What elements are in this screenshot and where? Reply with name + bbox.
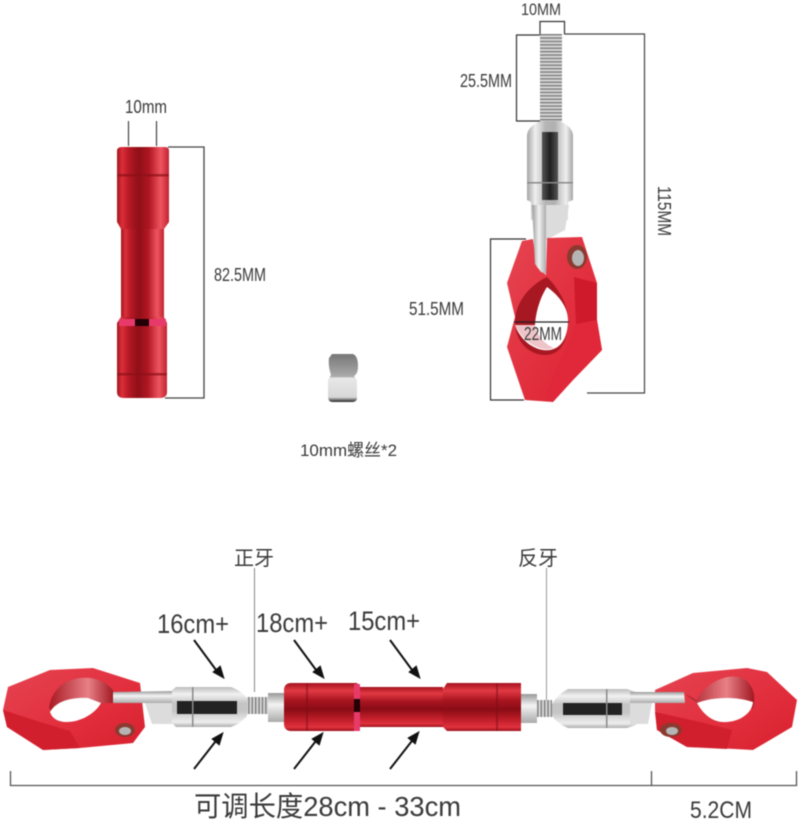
dimension: total length 115MM: 115MM (654, 186, 674, 236)
right nut (521, 694, 537, 723)
left bracket plate (145, 703, 172, 724)
left red clamp (3, 668, 145, 750)
dimension bracket: clamp width (652, 771, 796, 786)
dimension: clamp height 51.5MM (409, 239, 526, 400)
clamp bore (515, 277, 568, 355)
right red clamp (655, 668, 797, 750)
right bracket plate (630, 703, 652, 724)
label: standard thread: 正牙 (234, 548, 274, 570)
clamp arm (532, 205, 546, 274)
dimension: bore 22MM: 22MM (524, 324, 562, 344)
label: reverse thread: 反牙 (518, 547, 558, 570)
left silver sleeve (172, 687, 247, 727)
dimension: rod width 10mm (125, 97, 167, 146)
sleeve band (527, 182, 573, 184)
dimension: total length 115MM (564, 34, 674, 393)
silver bracket plate (546, 205, 569, 240)
left sleeve dark bar (177, 701, 237, 714)
right clamp arm (630, 692, 685, 703)
dimension: thread length 25.5MM (460, 35, 540, 121)
right thread (537, 700, 552, 717)
clamp bolt (567, 245, 587, 269)
dimension: rod length 82.5MM: 82.5MM (214, 265, 266, 285)
left clamp arm (113, 691, 172, 703)
panel: spacer rod with dimensions (117, 97, 266, 398)
sleeve dark bar (542, 132, 558, 200)
right silver sleeve (552, 689, 636, 728)
red clamp (507, 237, 602, 402)
left sleeve band (192, 687, 194, 727)
dimension: thread width 10MM (521, 0, 564, 34)
red spacer rod (117, 147, 169, 398)
left thread (247, 697, 269, 714)
threaded stud (540, 34, 562, 122)
arrows: pointing at parts (194, 640, 419, 769)
label: 16cm+: 16cm+ (157, 609, 229, 639)
panel: rod end with clamp and dimensions (409, 0, 674, 402)
dimension: clamp height 51.5MM: 51.5MM (409, 299, 464, 319)
dimension: bore 22MM (514, 322, 569, 344)
red tube (284, 683, 521, 731)
label: 5.2CM: 5.2CM (690, 797, 752, 824)
panel: hex nut (300, 354, 397, 460)
dimension: rod width 10mm: 10mm (125, 97, 167, 117)
dimension: thread width 10MM: 10MM (521, 0, 561, 19)
icon: hex nut (328, 354, 358, 402)
label: 15cm+: 15cm+ (348, 606, 420, 636)
right sleeve dark bar (563, 703, 622, 715)
label: 10mm screws x2: 10mm螺丝*2 (300, 441, 397, 460)
right sleeve band (606, 689, 608, 728)
panel: assembled bar (3, 547, 797, 824)
dimension: thread length 25.5MM: 25.5MM (460, 71, 512, 91)
dimension: rod length 82.5MM (165, 147, 266, 398)
left nut (268, 693, 284, 722)
dimension bracket: adjustable length (10, 771, 652, 786)
label: 18cm+: 18cm+ (256, 608, 328, 638)
label: adjustable length 28cm-33cm: 可调长度28cm - 33cm (194, 791, 461, 822)
silver sleeve (527, 121, 573, 220)
